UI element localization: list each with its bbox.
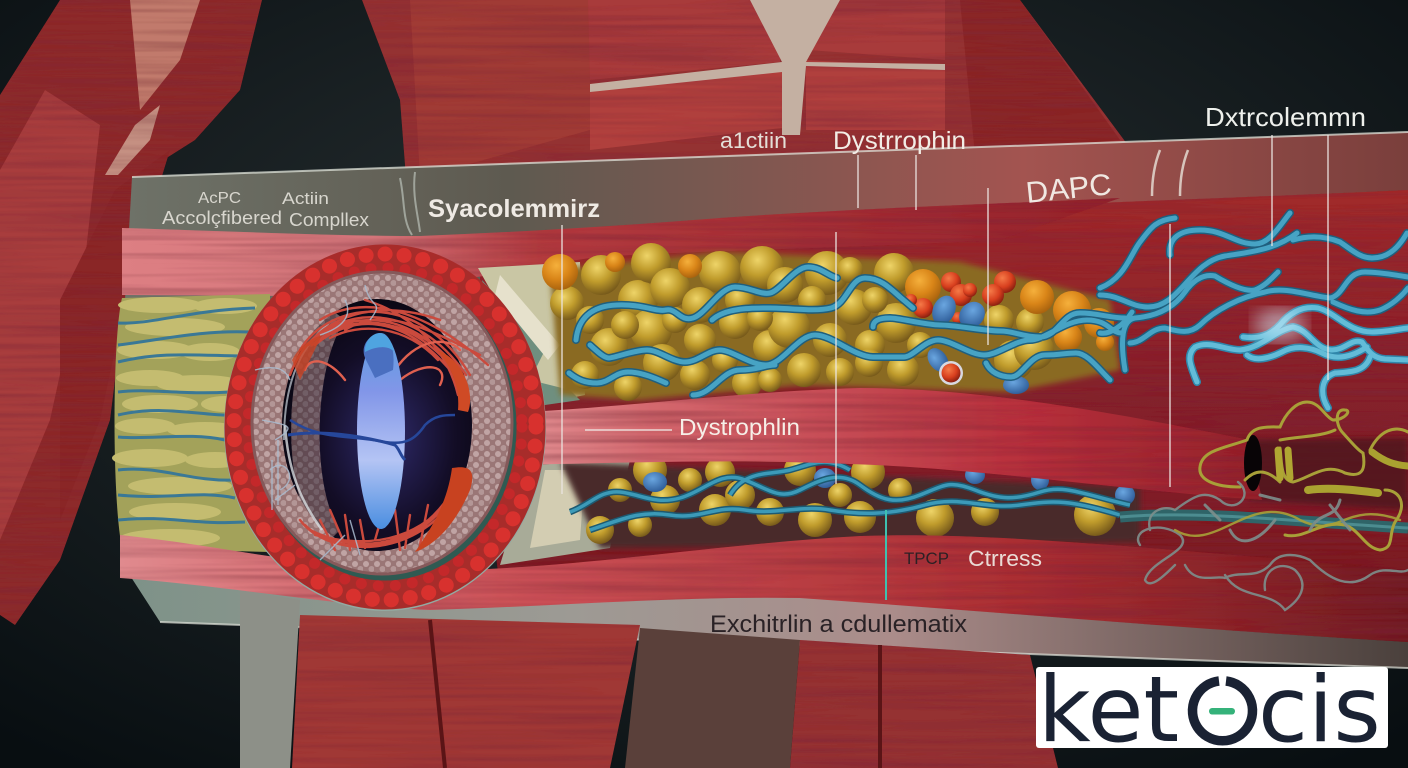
navy nerve lines bbox=[288, 415, 455, 460]
lower band and protein channel bbox=[560, 453, 1140, 548]
background muscle: torso bbox=[362, 0, 1130, 230]
label: AcPC / Actiin group: Compllex bbox=[289, 210, 369, 230]
yellow layered tissue stack bbox=[112, 294, 270, 552]
logo: ketocis: cis bbox=[1258, 658, 1381, 763]
central muscle fibre tube bbox=[446, 388, 1262, 500]
abdominal tendons bbox=[590, 0, 945, 135]
teal marker line bbox=[885, 510, 887, 600]
upper gold protein cluster bbox=[542, 243, 1120, 401]
tube end: dark cut opening bbox=[1244, 435, 1262, 491]
red molecules with blue caps bbox=[905, 271, 1029, 394]
label: Exchitrlin a cdullematix: Exchitrlin a cdullematix bbox=[710, 611, 967, 638]
label: AcPC / Actiin group: Actiin bbox=[282, 189, 329, 208]
logo: ketocis bbox=[1036, 658, 1388, 763]
dark interior bbox=[282, 299, 472, 551]
background muscle: left arm bbox=[0, 0, 262, 625]
label: Syacolemmirz: Syacolemmirz bbox=[428, 195, 600, 223]
muscle body: deep red fibre bbox=[480, 190, 1408, 610]
label: AcPC / Actiin group: AcPC bbox=[198, 190, 241, 207]
icon: power ring with green bar bbox=[1192, 681, 1252, 741]
right shadow and teal fibre bundle bbox=[1120, 438, 1408, 528]
label: Dystrophlin: Dystrophlin bbox=[679, 414, 800, 440]
glow highlight on strands bbox=[1254, 309, 1306, 341]
blue lens bbox=[357, 333, 405, 529]
top sarcolemma band bbox=[122, 198, 1120, 296]
orange-red fibre crown bbox=[290, 300, 488, 550]
blue dystrophin strands: upper and right bbox=[569, 213, 1408, 408]
logo: ketocis: ket bbox=[1038, 658, 1179, 763]
cross-section: circular fibre cut bbox=[225, 246, 545, 610]
label: a1ctiin: a1ctiin bbox=[720, 128, 787, 153]
pale membrane folds beside cross-section bbox=[478, 262, 630, 565]
lower sarcolemma band bbox=[120, 535, 1408, 642]
pale fibres on left bbox=[255, 285, 376, 560]
thin white leader lines bbox=[562, 135, 1328, 494]
pebbled ring bbox=[252, 272, 512, 574]
yellow folded protein ribbon bbox=[1200, 402, 1408, 550]
label: TPCP: TPCP bbox=[904, 549, 949, 568]
label: Dxtrcolemmn: Dxtrcolemmn bbox=[1205, 102, 1366, 132]
glass pane: translucent tissue sleeve bbox=[120, 132, 1408, 668]
background muscle: lower body bbox=[240, 590, 1058, 768]
label: Ctrress: Ctrress bbox=[968, 546, 1042, 571]
label: AcPC / Actiin group: Accolçfibered bbox=[162, 208, 282, 228]
label: DAPC: DAPC bbox=[1024, 168, 1113, 210]
gray-teal tangled fibres bbox=[1138, 482, 1408, 610]
label: Dystrrophin: Dystrrophin bbox=[833, 127, 966, 155]
label: AcPC / Actiin group bbox=[162, 189, 369, 230]
red bead ring bbox=[234, 254, 536, 600]
left inner curved surface bbox=[291, 305, 345, 545]
